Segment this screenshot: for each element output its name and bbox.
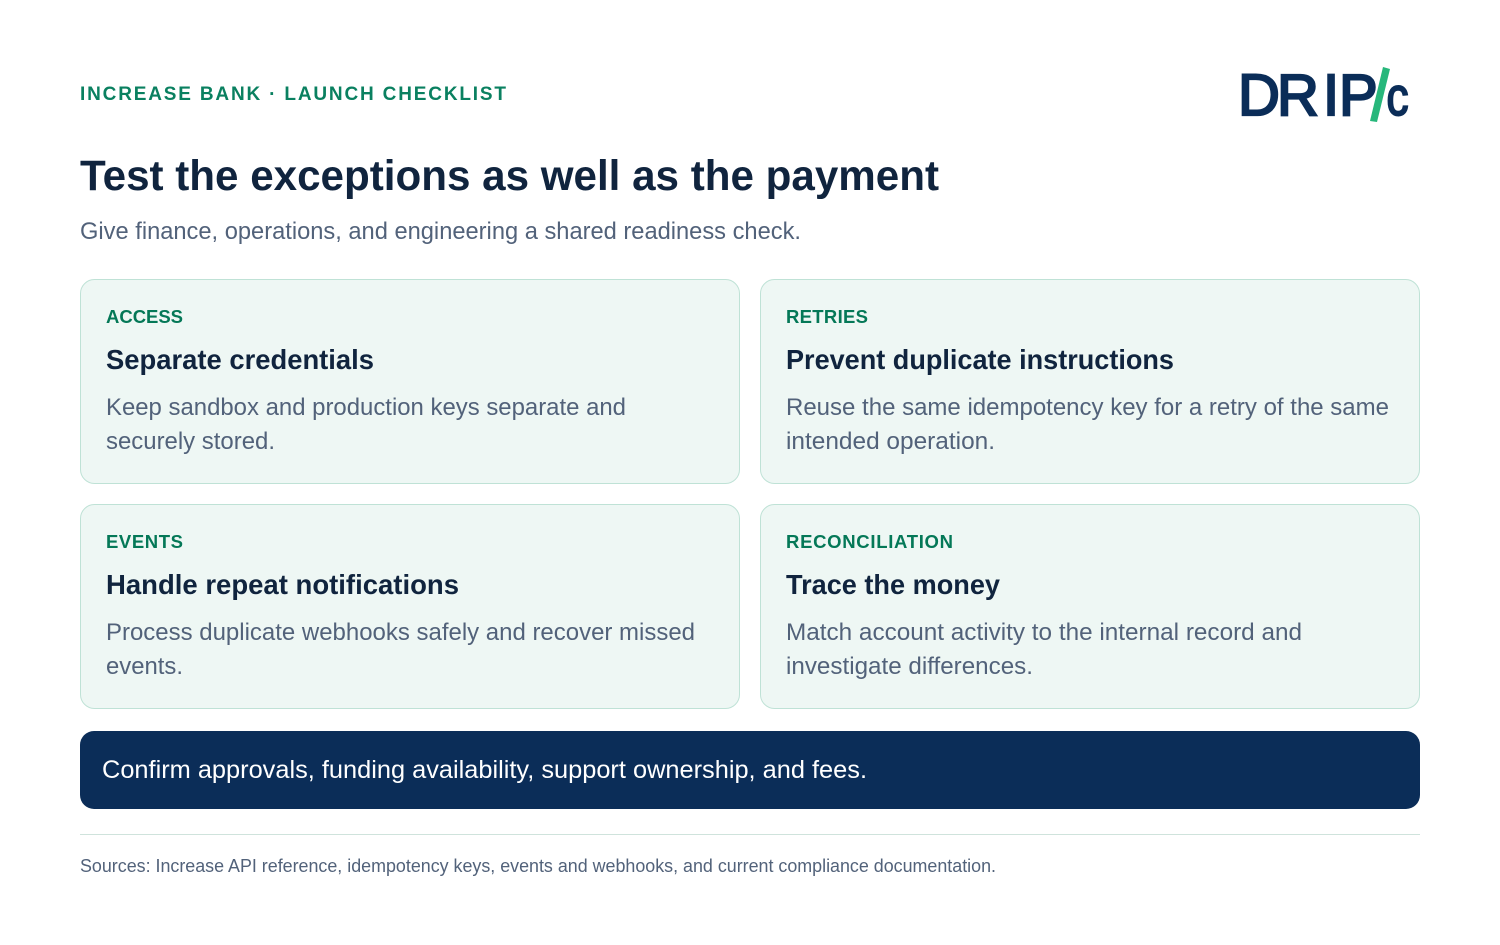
reconciliation body: [786, 619, 1302, 680]
events body: [106, 619, 695, 680]
access tag: ACCESS: [106, 306, 183, 327]
retries heading: Prevent duplicate instructions: [786, 344, 1174, 375]
panel: retries: [760, 280, 1420, 484]
reconciliation tag: RECONCILIATION: [786, 531, 953, 552]
eyebrow: INCREASE BANK · LAUNCH CHECKLIST: [80, 84, 506, 105]
reconciliation body: investigate differences.: [786, 653, 1033, 680]
logo: DRIP/c: c: [1386, 67, 1408, 127]
sources note: Sources: Increase API reference, idempotency keys, events and webhooks, and current compliance documentation.: [80, 856, 996, 876]
retries body: Reuse the same idempotency key for a retry of the same: [786, 394, 1389, 421]
callout banner: [80, 731, 1420, 809]
events body: Process duplicate webhooks safely and recover missed: [106, 619, 695, 646]
events heading: Handle repeat notifications: [106, 569, 459, 600]
reconciliation heading: Trace the money: [786, 569, 1001, 600]
access body: [106, 394, 626, 455]
access body: Keep sandbox and production keys separate and: [106, 394, 626, 421]
access heading: Separate credentials: [106, 344, 374, 375]
retries body: intended operation.: [786, 428, 995, 455]
retries tag: RETRIES: [786, 306, 868, 327]
events tag: EVENTS: [106, 531, 183, 552]
reconciliation body: Match account activity to the internal record and: [786, 619, 1302, 646]
subtitle: Give finance, operations, and engineering a shared readiness check.: [80, 218, 801, 245]
callout banner: Confirm approvals, funding availability, support ownership, and fees.: [102, 756, 867, 784]
title: Test the exceptions as well as the payment: [80, 152, 939, 200]
access body: securely stored.: [106, 428, 275, 455]
events body: events.: [106, 653, 183, 680]
panel: events: [80, 504, 740, 708]
retries body: [786, 394, 1389, 455]
panel: reconciliation: [760, 504, 1420, 708]
panel: access: [80, 280, 740, 484]
logo: DRIP/c: DRIP: [1238, 63, 1378, 128]
